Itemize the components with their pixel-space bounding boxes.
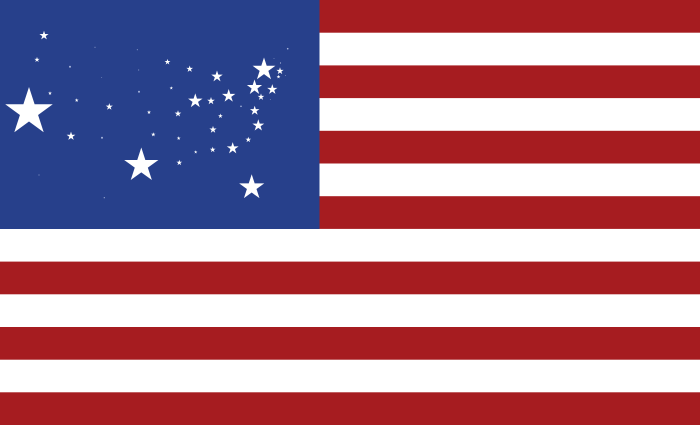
large stars (5, 58, 275, 198)
tiny stars (38, 47, 289, 198)
small stars (48, 75, 280, 165)
blue canton (0, 0, 320, 229)
medium stars (34, 31, 284, 153)
